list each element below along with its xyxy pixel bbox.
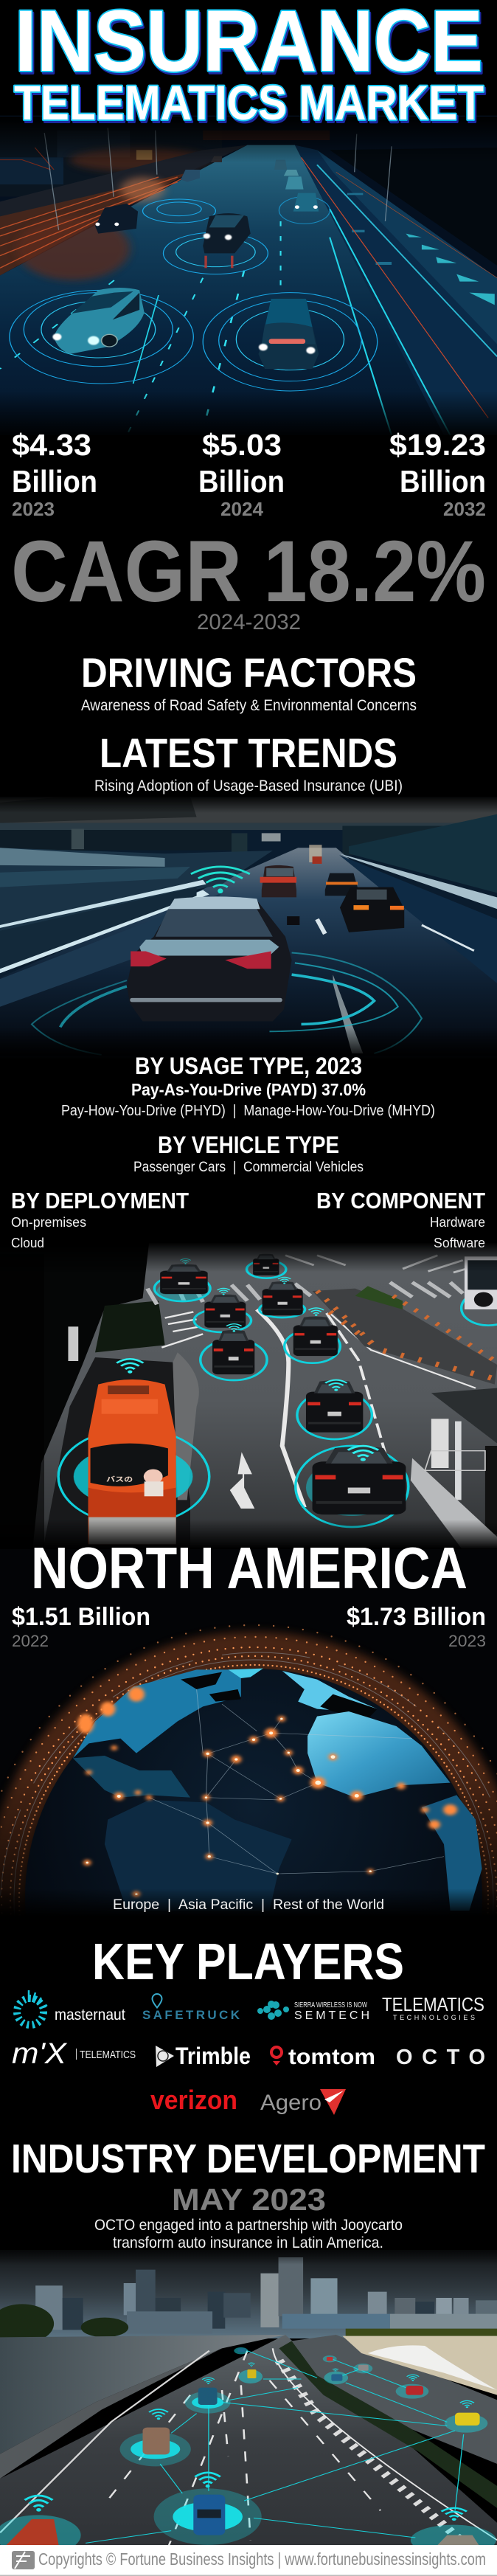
- value: on-premises: On-premises: [11, 1215, 86, 1230]
- heading: BY DEPLOYMENT: [11, 1188, 189, 1213]
- stat 2032: 2032: [443, 498, 486, 520]
- image: street with connected vehicles and bus: [0, 1243, 497, 1559]
- stat 2032: Billion: [400, 464, 486, 499]
- logo: verizon: verizon: [150, 2085, 237, 2115]
- road surface: [0, 848, 497, 1056]
- sensor pools: [0, 2347, 496, 2555]
- values: Passenger Cars | Commercial Vehicles: [133, 1160, 364, 1175]
- value: cloud: Cloud: [11, 1236, 44, 1250]
- asia edge: [422, 1795, 482, 1911]
- other traffic: [95, 156, 319, 234]
- south america: [105, 1800, 292, 1911]
- city glows: [77, 1687, 457, 1897]
- latest trends text: Rising Adoption of Usage-Based Insurance (UBI): [94, 778, 403, 794]
- logo: trimble: Trimble: [175, 2043, 251, 2069]
- other regions: Europe | Asia Pacific | Rest of the World: [113, 1897, 384, 1913]
- image fades: [0, 795, 497, 1059]
- right retaining wall: [342, 2336, 497, 2395]
- connection lines: [86, 2351, 464, 2543]
- overpass: [0, 823, 497, 859]
- development description: [94, 2217, 403, 2251]
- cars: [160, 1254, 406, 1514]
- north america: [73, 1669, 241, 1758]
- driving factors text: Awareness of Road Safety & Environmental Concerns: [81, 697, 417, 714]
- trees: [0, 2304, 497, 2344]
- dark trees and pavement: [0, 1243, 199, 1559]
- logo: safetruck: SAFETRUCK: [142, 2008, 240, 2022]
- heading: BY VEHICLE TYPE: [158, 1132, 339, 1158]
- segment: by deployment: [11, 1188, 189, 1250]
- traffic ahead: [260, 845, 404, 932]
- connected car: middle: [203, 213, 251, 268]
- heading: driving factors: DRIVING FACTORS: [81, 649, 417, 696]
- north america 2023 value: [347, 1603, 486, 1650]
- hatched shoulder: [279, 2361, 469, 2547]
- road surface: [0, 2335, 497, 2547]
- network lines: [149, 1689, 444, 1874]
- globe bottom fade: [0, 1888, 497, 1917]
- orange network halo: [0, 1624, 497, 1912]
- stat 2023: $4.33: [12, 428, 91, 462]
- left city backdrop: [0, 123, 330, 197]
- logo: agero: [260, 2089, 346, 2115]
- logo: masternaut: [17, 1990, 125, 2025]
- segment: by usage type: [61, 1053, 435, 1119]
- value: hardware: Hardware: [430, 1215, 485, 1230]
- skyline: [35, 2257, 497, 2333]
- traffic cones and barrier: [313, 1286, 497, 1385]
- median hedge: [279, 2341, 497, 2508]
- stat 2032: $19.23: [389, 428, 486, 462]
- value: software: Software: [434, 1236, 485, 1250]
- north america 2023 value: 2023: [448, 1632, 486, 1650]
- globe sphere: [25, 1669, 482, 1910]
- left wall: [0, 2335, 285, 2454]
- right roadside strip: [295, 145, 497, 435]
- segment: by vehicle type: [133, 1132, 364, 1175]
- stat 2024: Billion: [198, 464, 285, 499]
- logo: octo: OCTO: [396, 2046, 485, 2069]
- development description: transform auto insurance in Latin America.: [113, 2234, 383, 2251]
- logo: masternaut: masternaut: [55, 2007, 125, 2023]
- development description: OCTO engaged into a partnership with Jooycarto: [94, 2217, 403, 2234]
- footer logo: [12, 2551, 35, 2569]
- other values: Pay-How-You-Drive (PHYD) | Manage-How-You-Drive (MHYD): [61, 1103, 435, 1119]
- africa: [307, 1711, 451, 1798]
- left barriers: [0, 848, 273, 1007]
- development date: MAY 2023: [172, 2182, 326, 2217]
- connected car: bottom centre: [258, 297, 319, 369]
- logo: semtech: SEMTECH: [294, 2009, 369, 2022]
- segment: by component: [316, 1188, 485, 1250]
- logo: mix telematics: m'X: [12, 2037, 67, 2070]
- parked bus top right: [465, 1256, 497, 1309]
- image fades: [0, 1242, 497, 1549]
- shelter and railing: [68, 1326, 497, 1559]
- stat 2023: 2023: [12, 498, 55, 520]
- stat 2032: [389, 428, 486, 520]
- main road surface: [0, 145, 444, 435]
- stat 2024: [198, 428, 285, 520]
- image: car on motorway with wifi signal: [0, 797, 497, 1059]
- greenland and europe highlights: [181, 1669, 378, 1719]
- wifi icon: [191, 867, 250, 893]
- hero image fades: [0, 117, 497, 438]
- wifi icons: [117, 1258, 378, 1461]
- heading: latest trends: LATEST TRENDS: [100, 730, 397, 776]
- right carriageway: [292, 2335, 497, 2464]
- street poles: [44, 128, 392, 230]
- image: network globe: [0, 1549, 497, 1912]
- image: city motorway with connected vehicles: [0, 2250, 497, 2555]
- market size stats: [12, 428, 486, 520]
- CAGR period: 2024-2032: [197, 610, 301, 634]
- orange bus: [88, 1379, 176, 1544]
- north america 2023 value: $1.73 Billion: [347, 1603, 486, 1631]
- cyan rings: [58, 1261, 497, 1527]
- north america 2022 value: $1.51 Billion: [12, 1603, 150, 1631]
- logo: mix telematics: [12, 2037, 136, 2070]
- main car: [127, 896, 299, 1021]
- image top fade: [0, 2243, 497, 2265]
- lane dashes: [102, 2351, 380, 2547]
- central america: [73, 1756, 190, 1798]
- stat 2023: Billion: [12, 464, 97, 499]
- lane lines: [0, 157, 497, 435]
- logo: semtech: SIERRA WIRELESS IS NOW: [294, 2001, 367, 2009]
- logo: agero: Agero: [260, 2091, 322, 2115]
- vehicles: [7, 2348, 480, 2545]
- road arrow: [230, 1452, 254, 1509]
- heading: key players: KEY PLAYERS: [92, 1933, 404, 1990]
- heading: BY USAGE TYPE, 2023: [135, 1053, 362, 1079]
- logo: semtech: [257, 2001, 369, 2022]
- stat 2023: [12, 428, 97, 520]
- sensor swooshes: [32, 953, 422, 1055]
- wifi icons: [25, 2363, 474, 2521]
- orange bus: バスの: [106, 1476, 133, 1483]
- footer band: [0, 2545, 497, 2576]
- lead value: Pay-As-You-Drive (PAYD) 37.0%: [131, 1080, 366, 1099]
- sensor rings: [10, 197, 378, 391]
- connected car: bottom left: [52, 288, 145, 354]
- logo: tomtom: tomtom: [288, 2045, 375, 2069]
- stat 2024: $5.03: [202, 428, 282, 462]
- north america 2022 value: [12, 1603, 150, 1650]
- logo: mix telematics: TELEMATICS: [80, 2049, 136, 2061]
- title: [14, 0, 484, 130]
- left carriageway with light trails: [0, 145, 247, 280]
- logo: safetruck: [142, 1994, 240, 2022]
- north america 2022 value: 2022: [12, 1632, 49, 1650]
- white lane lines: [161, 1309, 476, 1507]
- logo: telematics technologies: TECHNOLOGIES: [393, 2014, 475, 2021]
- right barriers: [317, 814, 497, 1053]
- stat 2024: 2024: [220, 498, 264, 520]
- left road edge line: [0, 2351, 209, 2532]
- hero image: night highway with connected cars: [0, 116, 497, 435]
- crosswalks: [147, 1256, 466, 1304]
